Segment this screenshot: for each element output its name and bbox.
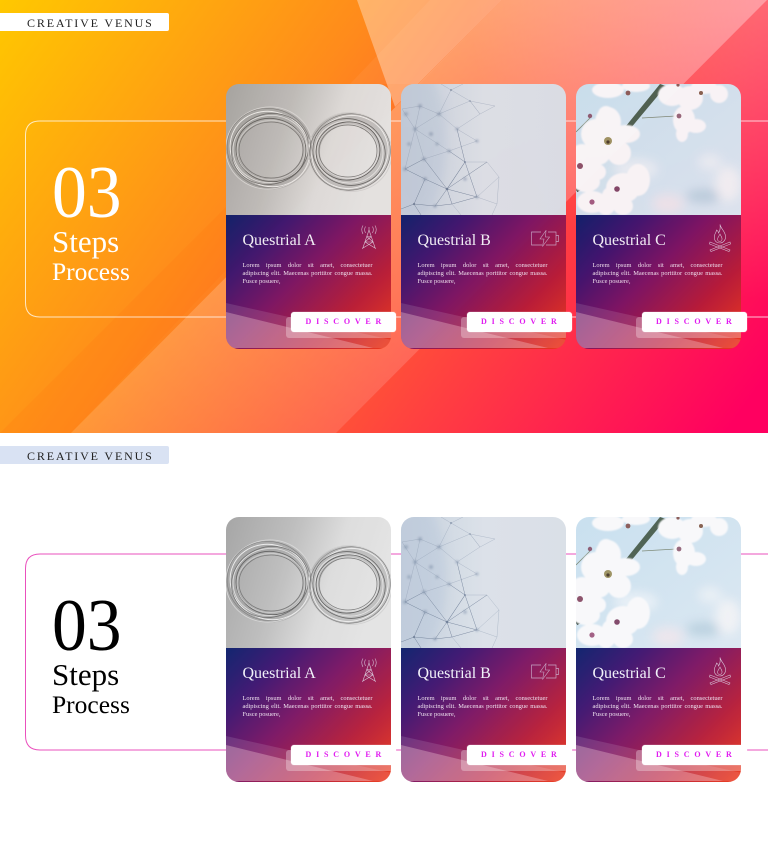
image: network mesh	[401, 84, 566, 215]
image: cherry blossoms	[576, 517, 741, 648]
heading: 03 Steps Process: Steps	[52, 657, 119, 692]
icon: battery charge	[531, 663, 559, 680]
button: discover C: DISCOVER	[656, 316, 737, 326]
image: cherry blossoms	[576, 84, 741, 215]
diagonal light bands	[226, 736, 390, 781]
body text: Lorem ipsum dolor sit amet, consectetuer adipiscing elit. Maecenas porttitor congue massa. Fusce posuere,	[592, 695, 722, 718]
icon: battery charge	[531, 230, 559, 247]
body text: Lorem ipsum dolor sit amet, consectetuer adipiscing elit. Maecenas porttitor congue massa. Fusce posuere,	[418, 695, 548, 718]
heading: 03 Steps Process	[52, 152, 130, 286]
button: discover B: DISCOVER	[481, 316, 562, 326]
button shadow plate	[636, 317, 746, 338]
title: Questrial C	[592, 232, 666, 249]
background: orange to pink gradient with light diagonal bands	[0, 0, 768, 433]
body text: Lorem ipsum dolor sit amet, consectetuer adipiscing elit. Maecenas porttitor congue massa. Fusce posuere,	[242, 262, 372, 285]
button shadow plate	[636, 750, 746, 771]
diagonal light bands	[576, 736, 740, 781]
button: discover B: DISCOVER	[481, 750, 562, 758]
body text: Lorem ipsum dolor sit amet, consectetuer adipiscing elit. Maecenas porttitor congue massa. Fusce posuere,	[242, 695, 372, 718]
title: Questrial A	[242, 665, 316, 682]
card C	[576, 517, 741, 782]
card body	[576, 215, 742, 349]
button: discover C	[642, 745, 746, 765]
icon: campfire	[709, 224, 731, 252]
card B	[401, 84, 566, 349]
section: white variant	[0, 433, 768, 866]
button: discover B	[466, 312, 572, 332]
body text: Lorem ipsum dolor sit amet, consectetuer adipiscing elit. Maecenas porttitor congue massa. Fusce posuere,	[592, 262, 722, 285]
button shadow plate	[460, 317, 570, 338]
title: Questrial C	[592, 665, 666, 682]
heading: 03 Steps Process: Process	[52, 690, 130, 719]
title: Questrial A	[242, 232, 316, 249]
button: discover A	[291, 745, 396, 765]
diagonal light bands	[401, 303, 566, 348]
card A	[226, 517, 391, 782]
button: discover C: DISCOVER	[656, 750, 737, 758]
brand tag	[0, 446, 169, 464]
icon: radio tower	[362, 225, 376, 250]
title: Questrial B	[418, 665, 491, 682]
diagonal light bands	[576, 303, 740, 348]
brand tag: CREATIVE VENUS	[27, 448, 154, 462]
button: discover C	[642, 312, 746, 332]
title: Questrial B	[418, 232, 491, 249]
card C	[576, 84, 741, 349]
button: discover A	[291, 312, 396, 332]
steps frame outline	[25, 120, 768, 318]
diagonal light bands	[401, 736, 566, 781]
icon: campfire	[709, 657, 731, 685]
card B	[401, 517, 566, 782]
steps frame outline	[25, 554, 768, 750]
button: discover A: DISCOVER	[306, 750, 386, 758]
heading: 03 Steps Process	[52, 585, 130, 719]
button shadow plate	[460, 750, 570, 771]
section: gradient variant	[0, 0, 768, 433]
card body	[576, 648, 742, 782]
image: silver rings	[226, 84, 391, 215]
icon: radio tower	[362, 658, 376, 682]
button shadow plate	[286, 750, 396, 771]
card body	[400, 648, 566, 782]
brand tag: CREATIVE VENUS	[27, 16, 154, 30]
heading: 03 Steps Process: 03	[52, 585, 122, 667]
body text: Lorem ipsum dolor sit amet, consectetuer adipiscing elit. Maecenas porttitor congue massa. Fusce posuere,	[418, 262, 548, 285]
heading: 03 Steps Process: 03	[52, 152, 122, 234]
card body	[226, 215, 392, 349]
heading: 03 Steps Process: Steps	[52, 224, 119, 259]
card body	[400, 215, 566, 349]
button shadow plate	[286, 317, 396, 338]
button: discover B	[466, 745, 572, 765]
image: silver rings	[226, 517, 391, 648]
card body	[226, 648, 392, 782]
heading: 03 Steps Process: Process	[52, 257, 130, 286]
image: network mesh	[401, 517, 566, 648]
button: discover A: DISCOVER	[306, 316, 386, 326]
diagonal light bands	[226, 303, 390, 348]
card A	[226, 84, 391, 349]
brand tag	[0, 13, 169, 31]
